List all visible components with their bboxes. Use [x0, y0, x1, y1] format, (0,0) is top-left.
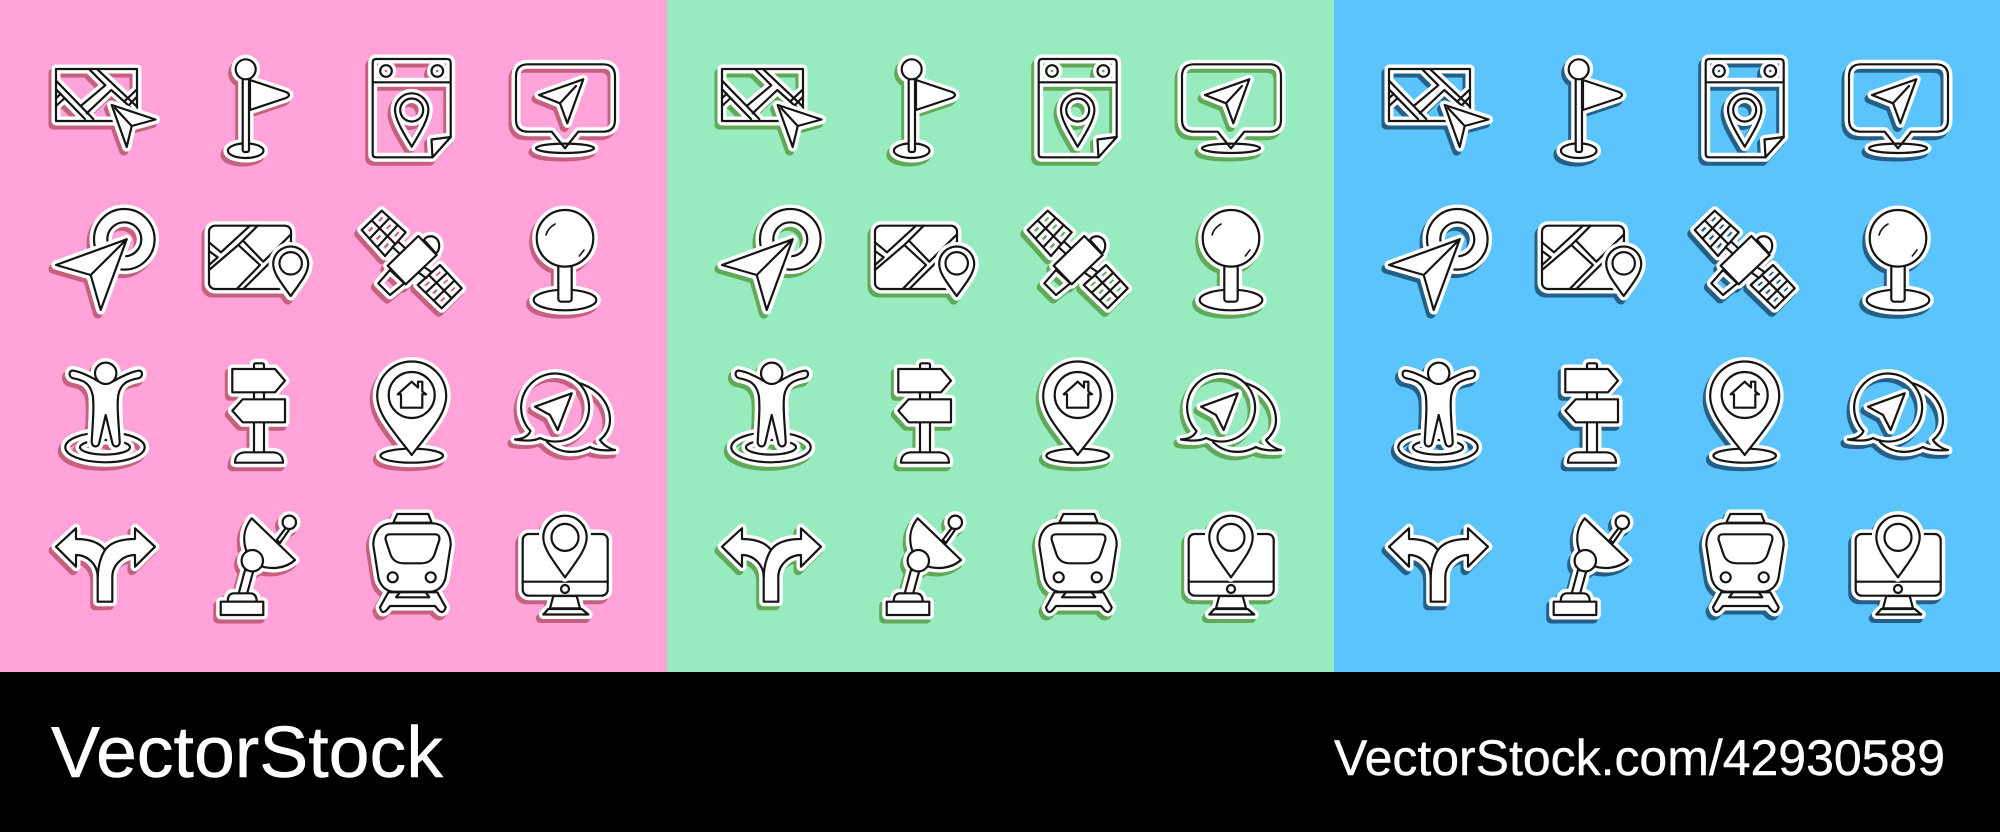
icon: location flag	[1558, 59, 1622, 162]
icon: cursor on target	[1386, 209, 1488, 314]
icon: speech bubble with navigation arrow	[1179, 64, 1281, 157]
icon: cursor on target	[719, 209, 821, 314]
icon: person on target	[62, 363, 145, 466]
icon: train	[1703, 514, 1784, 616]
icon: folded map with pin	[1539, 226, 1641, 300]
icon: satellite	[1025, 211, 1128, 312]
icon: cursor on target	[53, 209, 155, 314]
icon: forked road arrow	[719, 528, 821, 606]
icon: home location pin	[1707, 362, 1779, 467]
icon: document with pin	[1703, 59, 1784, 161]
brand logo text: VectorStock	[51, 713, 444, 793]
icon: street map with cursor	[53, 69, 156, 151]
icon: street map with cursor	[1386, 69, 1488, 151]
icon: train	[370, 514, 451, 616]
icon: satellite dish	[1551, 516, 1629, 619]
icon: satellite	[359, 211, 462, 312]
icon: train	[1036, 514, 1117, 616]
icon: satellite dish	[218, 516, 296, 619]
icon: person on target	[1395, 363, 1478, 466]
icon: person on target	[728, 363, 811, 466]
icon: chat bubbles with arrow	[512, 374, 615, 456]
icon: document with pin	[1036, 59, 1117, 161]
icon: monitor with pin	[1186, 516, 1274, 618]
icon: satellite	[1692, 211, 1795, 312]
icon: folded map with pin	[206, 226, 308, 300]
icon: forked road arrow	[1386, 528, 1488, 606]
image id text: VectorStock.com/42930589	[1334, 730, 1945, 786]
panel: blue icon set	[1334, 0, 2000, 672]
icon: push pin	[1864, 210, 1929, 314]
icon: folded map with pin	[872, 226, 974, 300]
footer band	[0, 672, 2000, 832]
icon: push pin	[1197, 210, 1262, 314]
icon: push pin	[531, 210, 596, 314]
icon: location flag	[225, 59, 289, 162]
icon: monitor with pin	[1853, 516, 1941, 618]
icon: road signpost	[1562, 363, 1618, 467]
icon: location flag	[891, 59, 955, 162]
icon: satellite dish	[884, 516, 962, 619]
panel: green icon set	[667, 0, 1334, 672]
icon: road signpost	[895, 363, 951, 467]
panel: pink icon set	[0, 0, 667, 672]
icon: home location pin	[1040, 362, 1112, 467]
icon: document with pin	[370, 59, 451, 161]
icon: monitor with pin	[520, 516, 608, 618]
icon: road signpost	[229, 363, 285, 467]
icon: speech bubble with navigation arrow	[1846, 64, 1948, 157]
icon: chat bubbles with arrow	[1845, 374, 1948, 456]
icon: forked road arrow	[53, 528, 155, 606]
icon: speech bubble with navigation arrow	[513, 64, 615, 157]
icon: home location pin	[374, 362, 446, 467]
icon: street map with cursor	[719, 69, 822, 151]
icon: chat bubbles with arrow	[1178, 374, 1281, 456]
